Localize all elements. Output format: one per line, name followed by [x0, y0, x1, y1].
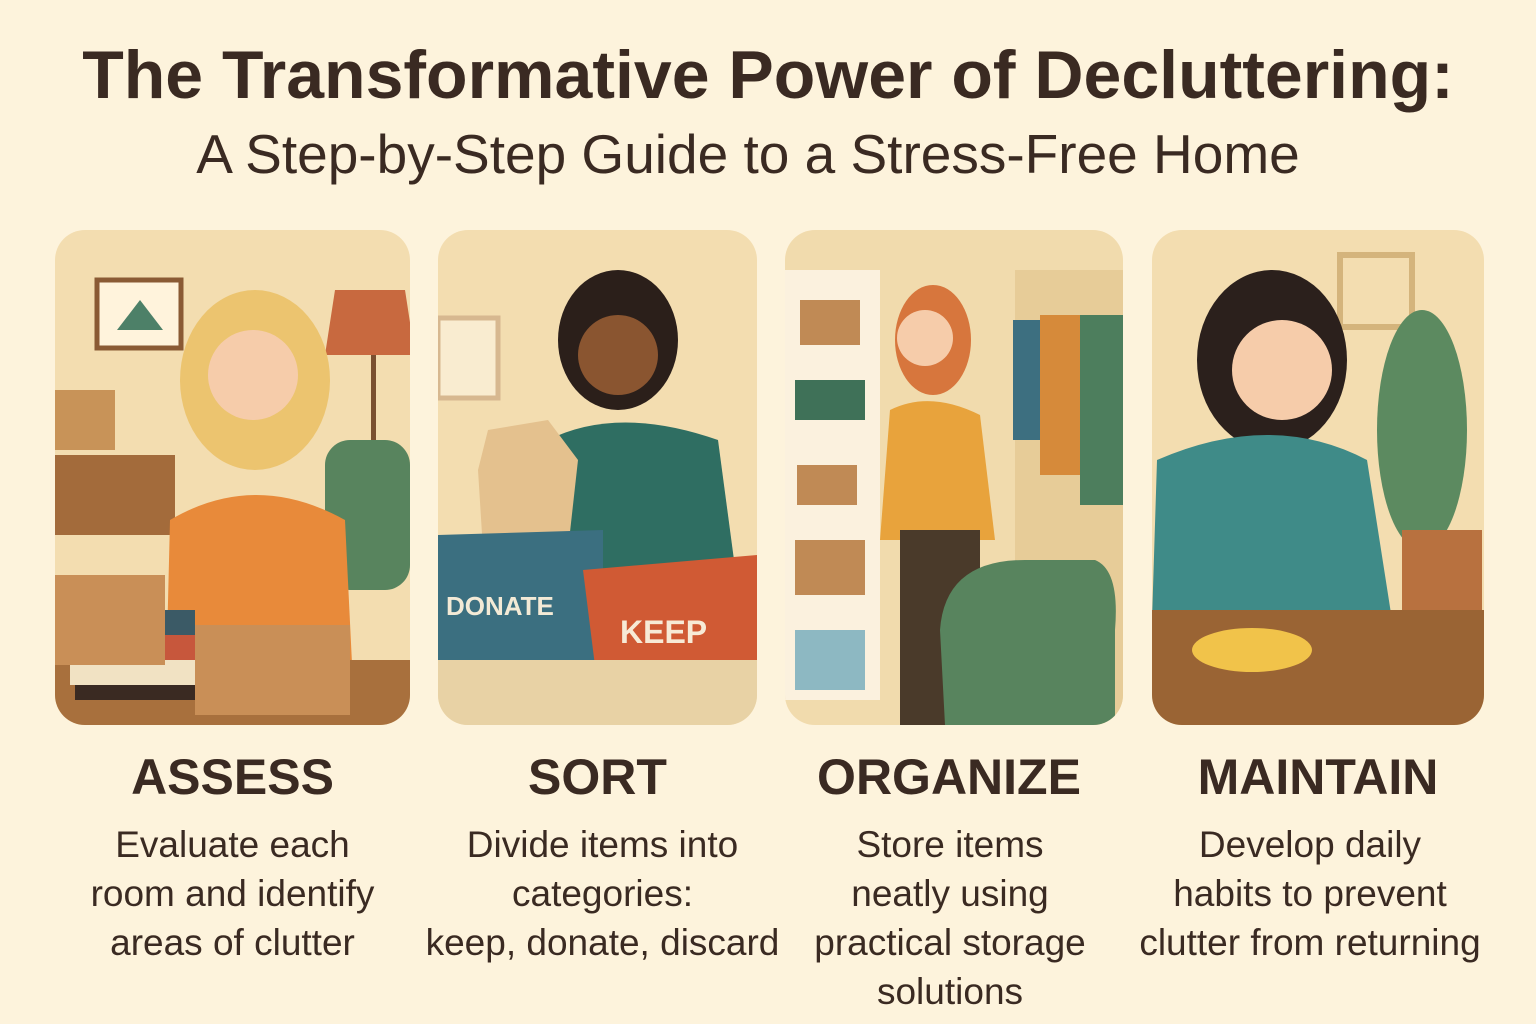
panel: assess [55, 230, 410, 725]
text: organize: practical storage [814, 922, 1086, 963]
text: sort: categories: [512, 873, 693, 914]
title: The Transformative Power of Decluttering: [82, 37, 1454, 113]
text: organize: neatly using [851, 873, 1049, 914]
heading: assess: ASSESS [131, 749, 334, 805]
text: maintain: habits to prevent [1173, 873, 1447, 914]
text: assess: Evaluate each [115, 824, 350, 865]
text: organize: solutions [877, 971, 1023, 1012]
panel: maintain [1152, 230, 1484, 725]
panel: sort: KEEP [620, 614, 707, 650]
text: maintain [1139, 824, 1481, 963]
heading: organize: ORGANIZE [817, 749, 1081, 805]
text: sort: keep, donate, discard [426, 922, 779, 963]
text: maintain: clutter from returning [1139, 922, 1481, 963]
text: organize [814, 824, 1086, 1012]
text: sort: Divide items into [467, 824, 738, 865]
text: assess: room and identify [91, 873, 374, 914]
subtitle: A Step-by-Step Guide to a Stress-Free Home [196, 123, 1300, 185]
heading: maintain: MAINTAIN [1198, 749, 1438, 805]
panel: sort [438, 230, 757, 725]
heading: sort: SORT [528, 749, 667, 805]
text: organize: Store items [856, 824, 1044, 865]
panel: sort: DONATE [446, 591, 554, 621]
panel: organize [785, 230, 1123, 725]
text: assess [91, 824, 374, 963]
text: assess: areas of clutter [110, 922, 355, 963]
text: sort [426, 824, 779, 963]
text: maintain: Develop daily [1199, 824, 1421, 865]
